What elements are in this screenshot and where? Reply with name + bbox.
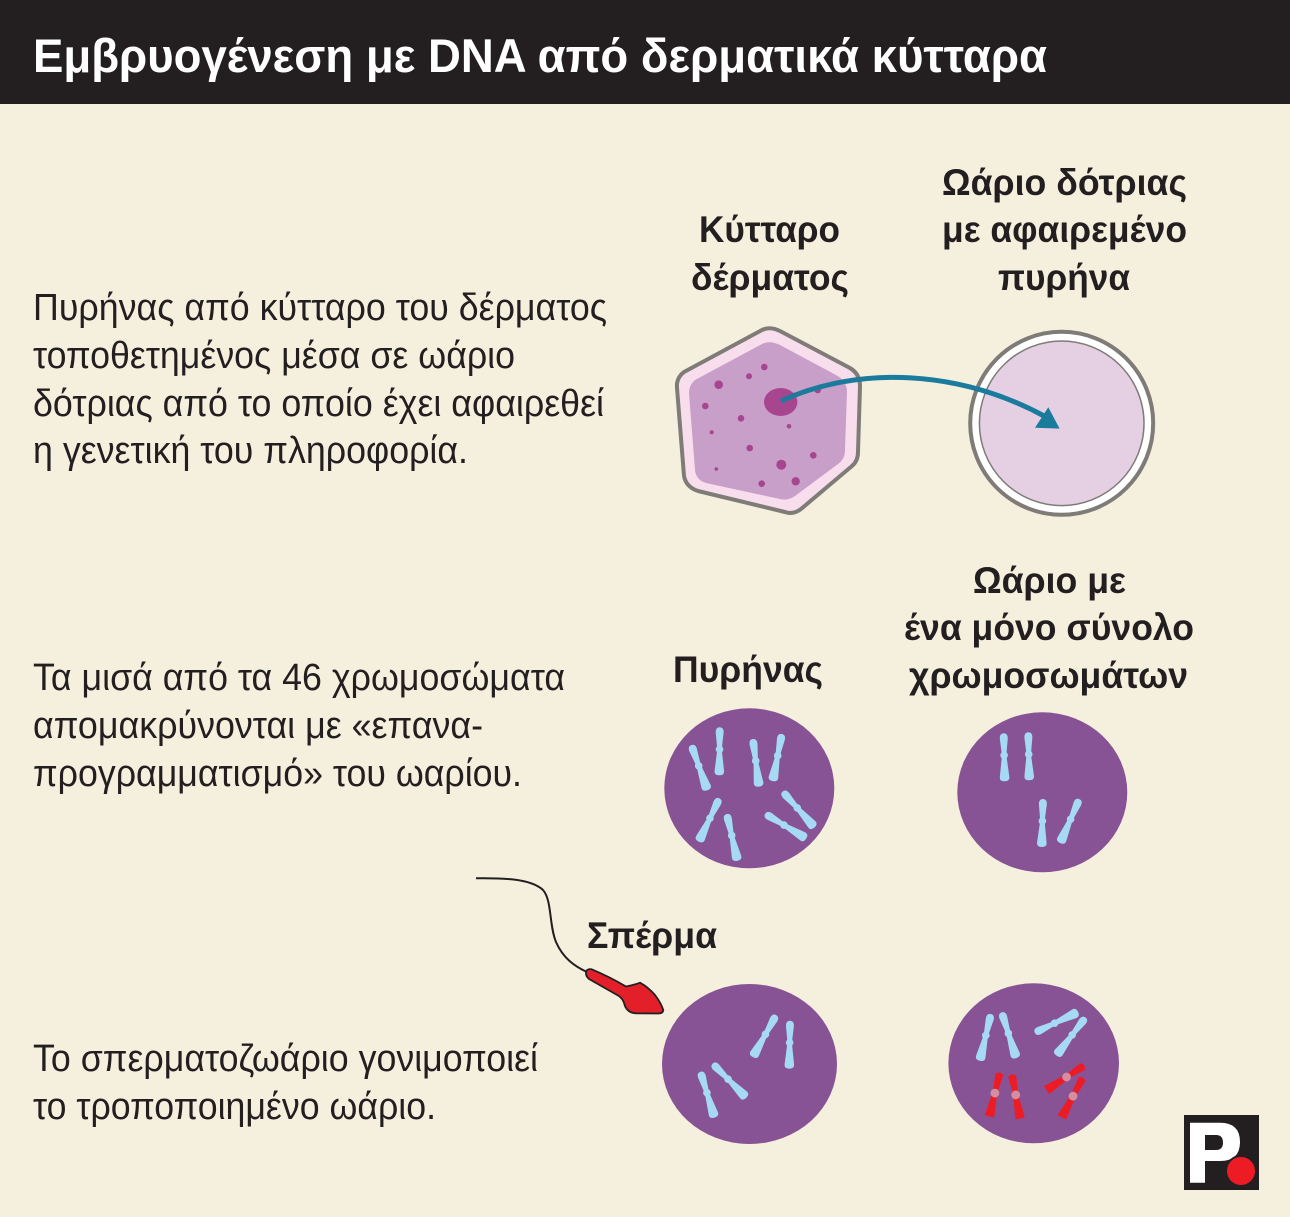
heading: skin cell: δέρματος: [691, 257, 849, 298]
heading: skin cell: [691, 209, 849, 298]
heading: enucleated donor egg: με αφαιρεμένο: [942, 209, 1187, 250]
illustration: skin cell: [677, 328, 860, 513]
heading: egg with a single chromosome set: χρωμοσωμάτων: [909, 655, 1188, 696]
arrow: nucleus transfer: [781, 377, 1060, 429]
text block: step 3 description: το τροποποιημένο ωάριο.: [33, 1086, 436, 1128]
text block: step 3 description: [33, 1038, 539, 1128]
text block: step 1 description: τοποθετημένος μέσα σε ωάριο: [33, 335, 515, 377]
heading: skin cell: Κύτταρο: [699, 209, 840, 250]
heading: enucleated donor egg: [942, 162, 1187, 298]
illustration: fertilized egg with blue and red chromosomes: [948, 983, 1119, 1143]
heading: egg with a single chromosome set: ένα μόνο σύνολο: [904, 607, 1194, 648]
text block: step 2 description: προγραμματισμό» του ωαρίου.: [33, 753, 522, 795]
text block: step 2 description: Τα μισά από τα 46 χρωμοσώματα: [33, 657, 565, 699]
illustration: modified egg with sperm arriving: [662, 984, 837, 1144]
text block: step 3 description: Το σπερματοζωάριο γονιμοποιεί: [33, 1038, 539, 1080]
logo: [1184, 1115, 1259, 1190]
text block: step 2 description: απομακρύνονται με «επανα-: [33, 705, 483, 747]
heading: egg with a single chromosome set: Ωάριο με: [973, 560, 1126, 601]
illustration: egg with half chromosome set: [957, 712, 1127, 872]
heading: sperm: Σπέρμα: [587, 915, 717, 956]
text block: step 2 description: [33, 657, 565, 795]
heading: enucleated donor egg: πυρήνα: [998, 257, 1130, 298]
text block: step 1 description: δότριας από το οποίο έχει αφαιρεθεί: [33, 383, 605, 425]
text block: step 1 description: Πυρήνας από κύτταρο του δέρματος: [33, 287, 607, 329]
heading: nucleus: Πυρήνας: [673, 649, 823, 690]
heading: egg with a single chromosome set: [904, 560, 1194, 696]
header: title bar: [0, 0, 1290, 104]
illustration: donor egg: [970, 332, 1153, 515]
text block: step 1 description: η γενετική του πληροφορία.: [33, 430, 468, 472]
icon: sperm: [476, 878, 663, 1014]
illustration: nucleus with full chromosome set: [664, 708, 834, 868]
heading: enucleated donor egg: Ωάριο δότριας: [942, 162, 1187, 203]
text block: step 1 description: [33, 287, 607, 472]
title: Εμβρυογένεση με DNA από δερματικά κύτταρα: [33, 29, 1047, 82]
